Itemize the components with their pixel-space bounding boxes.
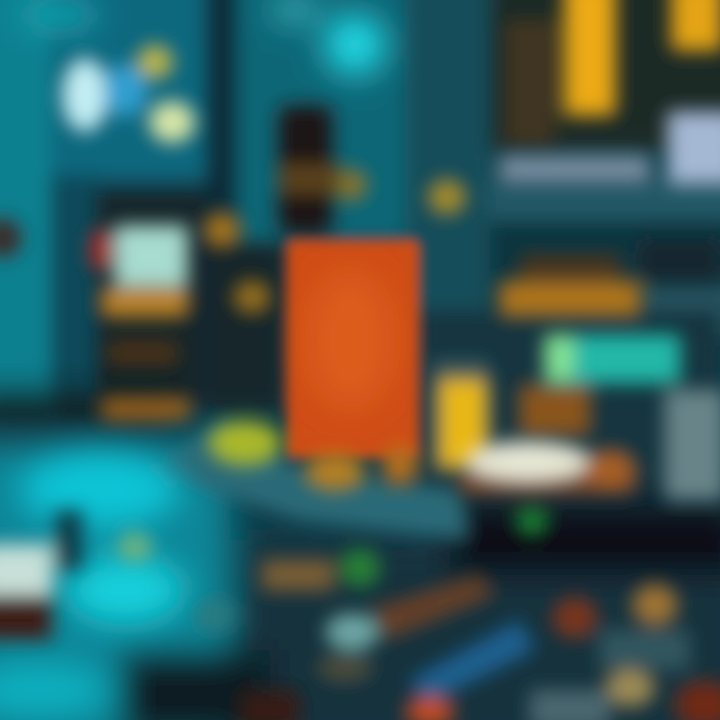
screen glow: top-left panel: [63, 46, 194, 142]
desk items: [209, 421, 635, 535]
dark bottle: [278, 105, 465, 235]
foreground desk clutter: [240, 549, 720, 720]
lower desk area: [0, 395, 720, 720]
orange book: [287, 240, 419, 458]
shelf: teal edge of desk: [150, 420, 470, 540]
yellow jar: [432, 360, 490, 470]
left shelf items: [0, 213, 270, 420]
yellow-orange bars top right: [505, 0, 720, 145]
bright cyan highlights: [0, 0, 385, 716]
foreground left objects: [0, 510, 235, 640]
right shelf objects: [500, 240, 720, 500]
background: wall panels: [0, 0, 720, 500]
pale shelf band: [500, 112, 720, 184]
